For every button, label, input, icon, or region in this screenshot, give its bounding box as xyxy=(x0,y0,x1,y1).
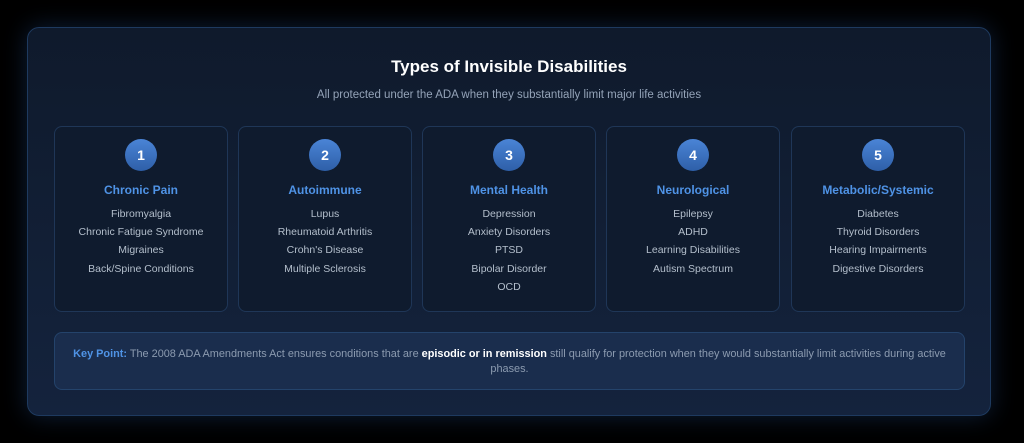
subtitle: All protected under the ADA when they substantially limit major life activities xyxy=(317,89,701,101)
card: metabolic: Diabetes xyxy=(857,208,899,220)
card: autoimmune: Rheumatoid Arthritis xyxy=(278,226,372,238)
card: metabolic: 5 xyxy=(874,147,882,163)
card: mental health: Depression xyxy=(482,208,536,220)
card: neurological: Epilepsy xyxy=(673,208,713,220)
card: mental health: 3 xyxy=(505,147,513,163)
card: chronic pain: Fibromyalgia xyxy=(111,208,171,220)
card: mental health: OCD xyxy=(497,281,521,293)
card: neurological: ADHD xyxy=(678,226,708,238)
title: Types of Invisible Disabilities xyxy=(391,57,627,76)
card: metabolic xyxy=(791,126,965,312)
callout: key point: Key Point: The 2008 ADA Amendments Act ensures conditions that are episodic or in remission still qualify for protection when they would substantially limit activities during active phases. xyxy=(73,348,946,375)
card: metabolic: Metabolic/Systemic xyxy=(822,183,934,197)
card: metabolic: Digestive Disorders xyxy=(832,263,924,275)
card: autoimmune: Lupus xyxy=(311,208,339,220)
card: neurological: Autism Spectrum xyxy=(653,263,733,275)
card: metabolic: Hearing Impairments xyxy=(829,244,927,256)
card: autoimmune xyxy=(238,126,412,312)
card: autoimmune: 2 xyxy=(321,147,329,163)
card: metabolic: Thyroid Disorders xyxy=(837,226,919,238)
card: chronic pain: Migraines xyxy=(118,244,164,256)
card: autoimmune: Autoimmune xyxy=(288,183,362,197)
card: autoimmune: Multiple Sclerosis xyxy=(284,263,366,275)
card: neurological: Neurological xyxy=(657,183,729,197)
card: mental health xyxy=(422,126,596,312)
card: chronic pain: Back/Spine Conditions xyxy=(88,263,194,275)
card: mental health: PTSD xyxy=(495,244,523,256)
card: chronic pain xyxy=(54,126,228,312)
card: mental health: Anxiety Disorders xyxy=(468,226,550,238)
card: neurological xyxy=(606,126,780,312)
card: chronic pain: 1 xyxy=(137,147,145,163)
card: mental health: Mental Health xyxy=(470,183,548,197)
callout: key point xyxy=(54,332,965,390)
card: neurological: Learning Disabilities xyxy=(646,244,740,256)
card: neurological: 4 xyxy=(689,147,697,163)
card: autoimmune: Crohn's Disease xyxy=(287,244,363,256)
card: mental health: Bipolar Disorder xyxy=(471,263,547,275)
card: chronic pain: Chronic Pain xyxy=(104,183,178,197)
card: chronic pain: Chronic Fatigue Syndrome xyxy=(79,226,203,238)
